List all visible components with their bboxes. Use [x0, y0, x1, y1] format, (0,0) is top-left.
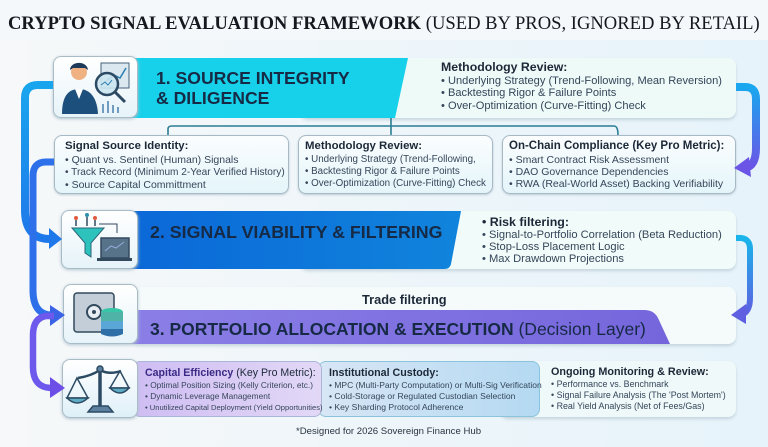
- panel: row 2 heading band: [130, 211, 461, 269]
- panel: institutional custody: • Cold-Storage or Regulated Custodian Selection: [329, 391, 515, 401]
- panel: institutional custody: • Key Sharding Protocol Adherence: [329, 402, 463, 412]
- panel: capital efficiency: Capital Efficiency (Key Pro Metric):: [145, 367, 316, 379]
- text: methodology review top: • Backtesting Rigor & Failure Points: [441, 87, 616, 99]
- text: trade filtering: Trade filtering: [362, 292, 447, 307]
- card: signal source identity: • Quant vs. Sentinel (Human) Signals: [65, 154, 239, 166]
- card: signal source identity: • Source Capital Committment: [65, 179, 206, 191]
- text: risk filtering: • Stop-Loss Placement Logic: [482, 241, 625, 253]
- heading: signal viability: 2. SIGNAL VIABILITY & FILTERING: [150, 222, 442, 242]
- card: signal source identity: • Track Record (Minimum 2-Year Verified History): [65, 167, 285, 178]
- card: signal source identity: [54, 135, 289, 194]
- arrow: right loop one: [734, 83, 760, 177]
- panel: ongoing monitoring: [500, 361, 736, 417]
- icon: analyst with magnifier: [53, 56, 138, 118]
- panel: ongoing monitoring: • Performance vs. Benchmark: [551, 379, 669, 389]
- panel: institutional custody: Institutional Custody:: [329, 367, 439, 379]
- panel: row 3 background: [130, 287, 736, 344]
- panel: row 2 details background: [300, 211, 736, 269]
- text: risk filtering: • Risk filtering:: [482, 215, 569, 229]
- panel: capital efficiency: • Dynamic Leverage Management: [145, 391, 270, 401]
- card: on-chain compliance: • Smart Contract Risk Assessment: [509, 154, 669, 166]
- panel: capital efficiency: • Unutilized Capital Deployment (Yield Opportunities): [145, 403, 323, 412]
- panel: ongoing monitoring: Ongoing Monitoring & Review:: [551, 366, 709, 378]
- arrow: allocation to custody: [30, 312, 65, 398]
- panel: row 3 heading band: [130, 310, 670, 344]
- card: methodology review: [298, 135, 493, 194]
- arrow: source to viability: [21, 81, 62, 249]
- card: methodology review: Methodology Review:: [305, 140, 422, 152]
- card: methodology review: • Backtesting Rigor & Failure Points: [305, 166, 460, 177]
- panel: capital efficiency: [132, 361, 322, 417]
- text: methodology review top: [441, 60, 722, 112]
- text: risk filtering: • Signal-to-Portfolio Correlation (Beta Reduction): [482, 229, 722, 241]
- heading: portfolio allocation: 3. PORTFOLIO ALLOCATION & EXECUTION (Decision Layer): [150, 319, 646, 339]
- panel: row 1 heading band: [130, 58, 408, 118]
- heading: source integrity: & DILIGENCE: [156, 88, 269, 108]
- arrow: right loop two: [731, 235, 753, 324]
- connector lines: [167, 118, 619, 135]
- text: risk filtering: [482, 215, 722, 265]
- panel: institutional custody: [318, 361, 540, 417]
- panel: ongoing monitoring: • Real Yield Analysis (Net of Fees/Gas): [551, 401, 705, 411]
- card: on-chain compliance: • DAO Governance Dependencies: [509, 166, 669, 178]
- card: methodology review: • Underlying Strategy (Trend-Following,: [305, 154, 476, 164]
- title: CRYPTO SIGNAL EVALUATION FRAMEWORK (USED BY PROS, IGNORED BY RETAIL): [8, 13, 760, 34]
- card: on-chain compliance: • RWA (Real-World Asset) Backing Verifiability: [509, 178, 723, 190]
- icon: balance scales: [62, 359, 138, 418]
- card: on-chain compliance: [502, 135, 736, 194]
- card: on-chain compliance: On-Chain Compliance (Key Pro Metric):: [509, 140, 724, 152]
- text: methodology review top: Methodology Review:: [441, 60, 567, 74]
- text: footnote: *Designed for 2026 Sovereign Finance Hub: [296, 426, 481, 437]
- icon: funnel and laptop: [61, 210, 138, 269]
- icon: safe and database: [63, 284, 138, 344]
- arrow: detail cards to allocation: [30, 158, 65, 326]
- heading: source integrity: [156, 68, 350, 108]
- panel: institutional custody: • MPC (Multi-Party Computation) or Multi-Sig Verification: [329, 380, 542, 390]
- card: methodology review: • Over-Optimization (Curve-Fitting) Check: [305, 178, 486, 189]
- panel: capital efficiency: • Optimal Position Sizing (Kelly Criterion, etc.): [145, 380, 313, 390]
- panel: row 1 details background: [300, 58, 736, 118]
- text: methodology review top: • Over-Optimization (Curve-Fitting) Check: [441, 100, 646, 112]
- heading: source integrity: 1. SOURCE INTEGRITY: [156, 68, 350, 88]
- text: risk filtering: • Max Drawdown Projections: [482, 253, 624, 265]
- text: methodology review top: • Underlying Strategy (Trend-Following, Mean Reversion): [441, 74, 722, 86]
- card: signal source identity: Signal Source Identity:: [65, 140, 188, 152]
- panel: ongoing monitoring: • Signal Failure Analysis (The 'Post Mortem'): [551, 390, 726, 400]
